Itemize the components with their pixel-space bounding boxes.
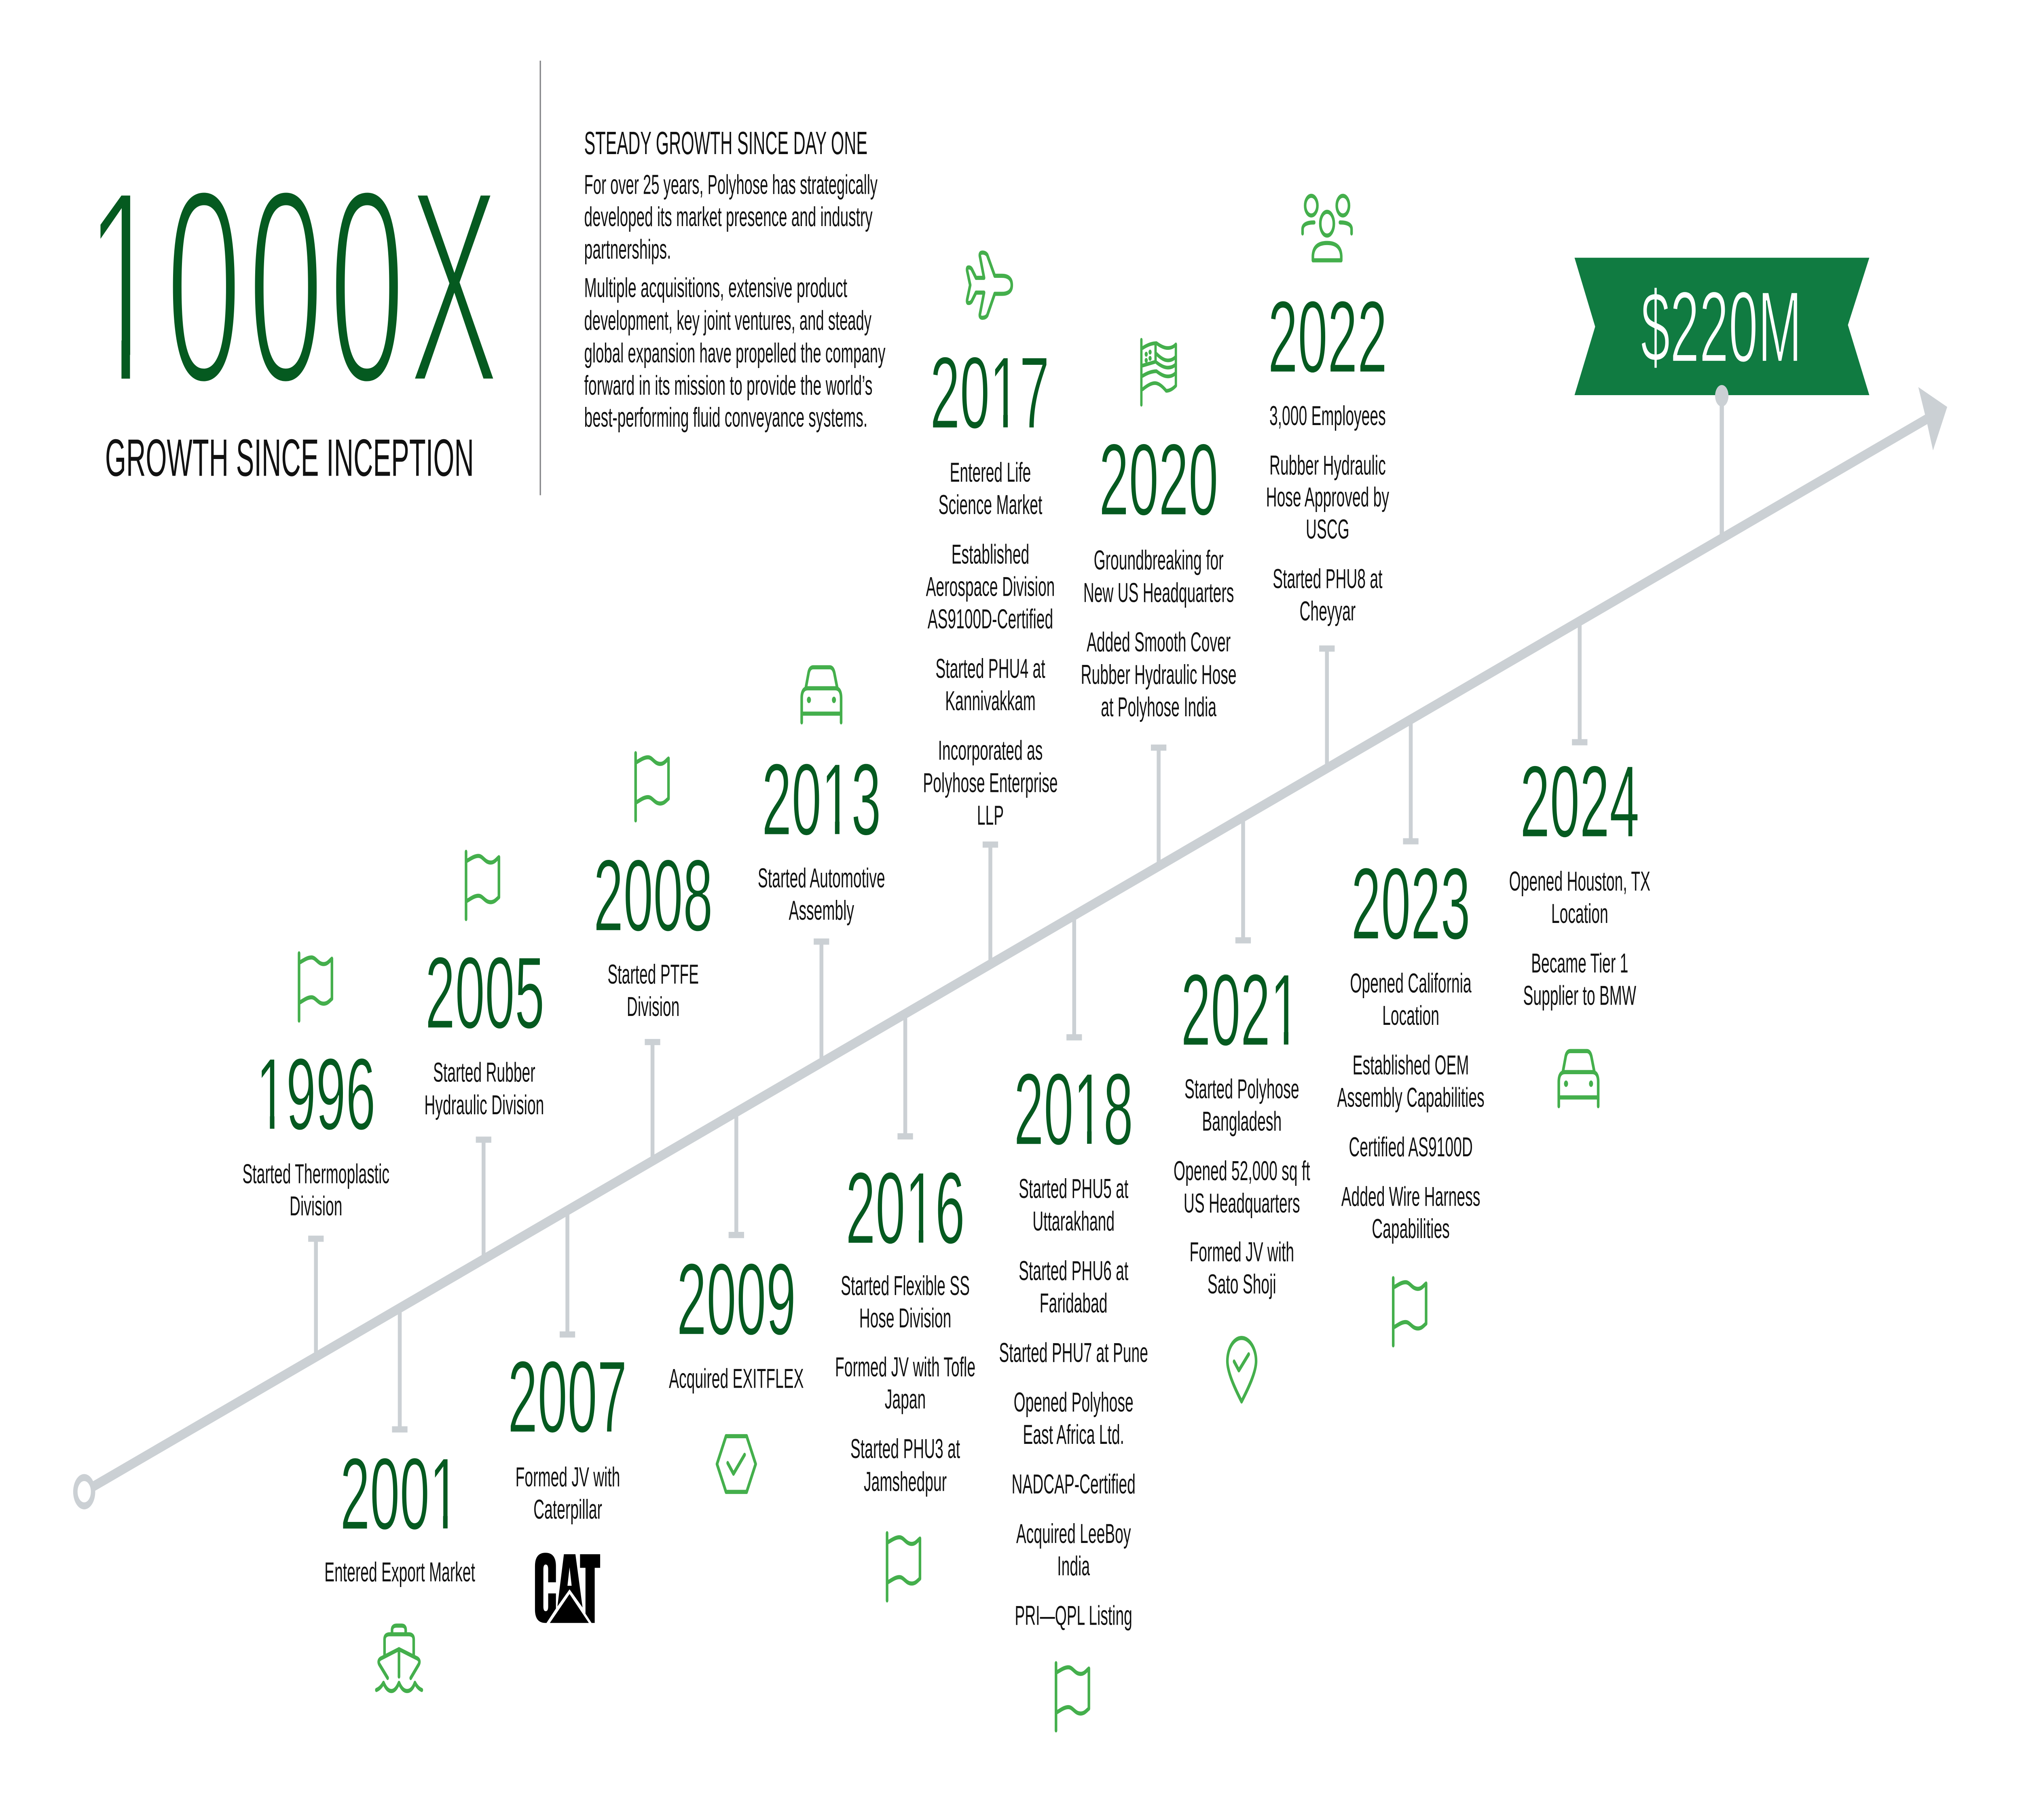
description: Formed JV with Tofle <box>835 1352 975 1382</box>
year: 2018 <box>1014 1052 1133 1166</box>
milestone 2013 <box>758 667 885 1062</box>
description: Assembly Capabilities <box>1337 1082 1485 1113</box>
subtitle: GROWTH SINCE INCEPTION <box>105 428 474 487</box>
description: Groundbreaking for <box>1094 545 1224 576</box>
icon: US flag <box>1141 340 1176 405</box>
intro heading: STEADY GROWTH SINCE DAY ONE <box>584 125 867 161</box>
big number: 1000X <box>86 132 499 441</box>
description: Established <box>952 539 1029 569</box>
stem <box>729 1112 744 1236</box>
milestone 2021 <box>1174 817 1310 1401</box>
stem <box>476 1139 491 1259</box>
stem <box>814 941 829 1062</box>
intro paragraphs: partnerships. <box>584 234 671 265</box>
milestone 2017 <box>923 252 1058 964</box>
stem <box>1235 817 1251 941</box>
description: Supplier to BMW <box>1523 980 1636 1011</box>
description: Japan <box>885 1384 926 1415</box>
stem <box>1066 915 1082 1038</box>
description: Established OEM <box>1353 1050 1469 1080</box>
stem <box>645 1042 660 1161</box>
timeline arrow <box>75 387 1947 1506</box>
year: 2001 <box>340 1436 459 1551</box>
description: Kannivakkam <box>945 686 1036 716</box>
description: Capabilities <box>1372 1214 1450 1244</box>
intro paragraphs: best-performing fluid conveyance systems. <box>584 402 867 432</box>
year: 1996 <box>256 1037 376 1151</box>
description: Started Flexible SS <box>841 1270 970 1301</box>
year: 2021 <box>1181 952 1300 1067</box>
icon: CAT logo <box>535 1553 600 1623</box>
stem <box>1403 720 1419 842</box>
description: Assembly <box>789 895 854 926</box>
description <box>242 1159 389 1221</box>
icon: flag <box>1393 1278 1426 1346</box>
description: India <box>1057 1551 1090 1581</box>
description: Incorporated as <box>938 735 1043 766</box>
description: Division <box>627 992 679 1022</box>
description <box>424 1057 544 1120</box>
icon: flag <box>636 753 668 821</box>
year: 2005 <box>425 935 544 1050</box>
description: Became Tier 1 <box>1531 948 1628 978</box>
description: Bangladesh <box>1202 1106 1282 1136</box>
year: 2016 <box>846 1151 965 1265</box>
description: East Africa Ltd. <box>1023 1419 1124 1450</box>
icon: hexagon check <box>717 1436 756 1492</box>
description: Opened 52,000 sq ft <box>1174 1155 1310 1186</box>
description <box>1174 1074 1310 1299</box>
description: Started Rubber <box>433 1057 535 1088</box>
description: USCG <box>1306 514 1349 544</box>
icon: people <box>1303 196 1352 260</box>
banner ribbon <box>1574 258 1869 395</box>
stem <box>1151 747 1166 866</box>
description <box>607 959 699 1022</box>
divider <box>540 61 541 495</box>
icon: car <box>802 667 841 722</box>
headline: 1000X growth <box>86 132 499 487</box>
intro paragraphs: development, key joint ventures, and steady <box>584 305 871 336</box>
description: Added Wire Harness <box>1341 1181 1480 1212</box>
milestone 2007 <box>508 1211 627 1623</box>
icon: plane <box>967 252 1012 318</box>
milestone 1996 <box>242 953 389 1357</box>
year: 2022 <box>1268 279 1387 394</box>
description: Added Smooth Cover <box>1087 627 1231 658</box>
description: Started Automotive <box>758 863 885 893</box>
milestone 2016 <box>835 1014 975 1600</box>
milestone 2009 <box>669 1112 804 1492</box>
description: Polyhose Enterprise <box>923 768 1058 798</box>
description <box>516 1462 620 1525</box>
milestone 2018 <box>999 915 1148 1731</box>
description: Started PHU6 at <box>1019 1255 1128 1286</box>
description: Started Polyhose <box>1184 1074 1299 1104</box>
description: Entered Life <box>950 457 1031 488</box>
description <box>1081 545 1237 722</box>
description: Started PHU5 at <box>1019 1174 1128 1204</box>
milestone 2024 <box>1509 621 1650 1106</box>
description: Formed JV with <box>516 1462 620 1492</box>
year: 2024 <box>1520 744 1639 859</box>
description: Hydraulic Division <box>424 1090 544 1120</box>
year: 2009 <box>677 1242 796 1356</box>
year: 2023 <box>1351 846 1470 961</box>
description: Opened California <box>1350 968 1472 999</box>
description <box>835 1270 975 1497</box>
description: Hose Division <box>859 1303 951 1333</box>
icon: car <box>1559 1051 1598 1106</box>
intro paragraphs: Multiple acquisitions, extensive product <box>584 273 847 303</box>
description: Acquired LeeBoy <box>1016 1518 1131 1549</box>
description: Opened Houston, TX <box>1509 866 1650 897</box>
description: Division <box>290 1191 342 1221</box>
stem <box>983 844 998 964</box>
intro paragraphs: developed its market presence and industry <box>584 201 873 232</box>
icon: ship <box>376 1625 422 1691</box>
milestone 2022 <box>1266 196 1390 768</box>
description: Certified AS9100D <box>1349 1132 1473 1162</box>
description: Started Thermoplastic <box>242 1159 389 1189</box>
description: Jamshedpur <box>864 1467 947 1497</box>
description: Started PHU4 at <box>935 653 1045 684</box>
description: Acquired EXITFLEX <box>669 1363 804 1394</box>
description: Hose Approved by <box>1266 482 1390 512</box>
description: Rubber Hydraulic <box>1269 450 1386 480</box>
milestone 2023 <box>1337 720 1485 1346</box>
description: Sato Shoji <box>1208 1269 1276 1299</box>
intro paragraphs: For over 25 years, Polyhose has strategically <box>584 169 878 200</box>
banner label: $220M <box>1641 271 1802 383</box>
description: Started PHU8 at <box>1273 563 1382 594</box>
description: Started PTFE <box>607 959 699 990</box>
description: Cheyyar <box>1300 596 1356 626</box>
stem <box>392 1308 408 1430</box>
description: Uttarakhand <box>1032 1206 1115 1236</box>
stem with dot <box>1715 385 1728 539</box>
description: Faridabad <box>1040 1288 1108 1318</box>
description <box>758 863 885 926</box>
description: NADCAP-Certified <box>1012 1469 1136 1499</box>
stem <box>897 1014 913 1137</box>
stem <box>1572 621 1587 743</box>
description: Formed JV with <box>1189 1237 1294 1267</box>
icon: flag <box>1056 1663 1089 1731</box>
icon: flag <box>466 852 499 919</box>
description: Started PHU7 at Pune <box>999 1337 1148 1368</box>
description <box>1266 400 1390 626</box>
description: Entered Export Market <box>324 1557 475 1587</box>
description: 3,000 Employees <box>1269 400 1386 431</box>
description: New US Headquarters <box>1083 578 1234 608</box>
description <box>923 457 1058 831</box>
milestone 2020 <box>1081 340 1237 866</box>
intro paragraphs: forward in its mission to provide the world’s <box>584 370 873 400</box>
milestone 2008 <box>594 753 713 1161</box>
stem <box>1319 648 1335 768</box>
description: Location <box>1551 899 1608 929</box>
intro paragraphs <box>584 169 885 432</box>
intro text block <box>584 125 885 432</box>
year: 2020 <box>1099 422 1218 537</box>
description: LLP <box>977 800 1004 831</box>
description: Caterpillar <box>533 1494 602 1525</box>
description: AS9100D-Certified <box>928 604 1053 634</box>
description: Science Market <box>939 489 1042 520</box>
milestone 2001 <box>324 1308 475 1691</box>
stem <box>560 1211 575 1335</box>
year: 2008 <box>594 838 713 952</box>
icon: flag <box>299 953 332 1020</box>
description: Location <box>1382 1001 1439 1031</box>
stem <box>308 1238 324 1357</box>
description: US Headquarters <box>1184 1188 1300 1219</box>
icon: location pin check <box>1227 1338 1256 1401</box>
year: 2013 <box>762 742 881 857</box>
revenue banner $220M <box>1574 258 1869 539</box>
description: Opened Polyhose <box>1014 1387 1134 1418</box>
intro paragraphs: global expansion have propelled the company <box>584 338 885 368</box>
description: at Polyhose India <box>1101 692 1216 722</box>
year: 2017 <box>930 335 1049 450</box>
description: PRI—QPL Listing <box>1015 1600 1132 1631</box>
description <box>1337 968 1485 1244</box>
icon: flag <box>887 1533 920 1600</box>
description <box>999 1174 1148 1631</box>
description: Aerospace Division <box>926 571 1055 602</box>
milestone 2005 <box>424 852 544 1259</box>
year: 2007 <box>508 1340 627 1454</box>
description <box>1509 866 1650 1011</box>
description: Started PHU3 at <box>850 1433 960 1464</box>
description: Rubber Hydraulic Hose <box>1081 659 1237 690</box>
